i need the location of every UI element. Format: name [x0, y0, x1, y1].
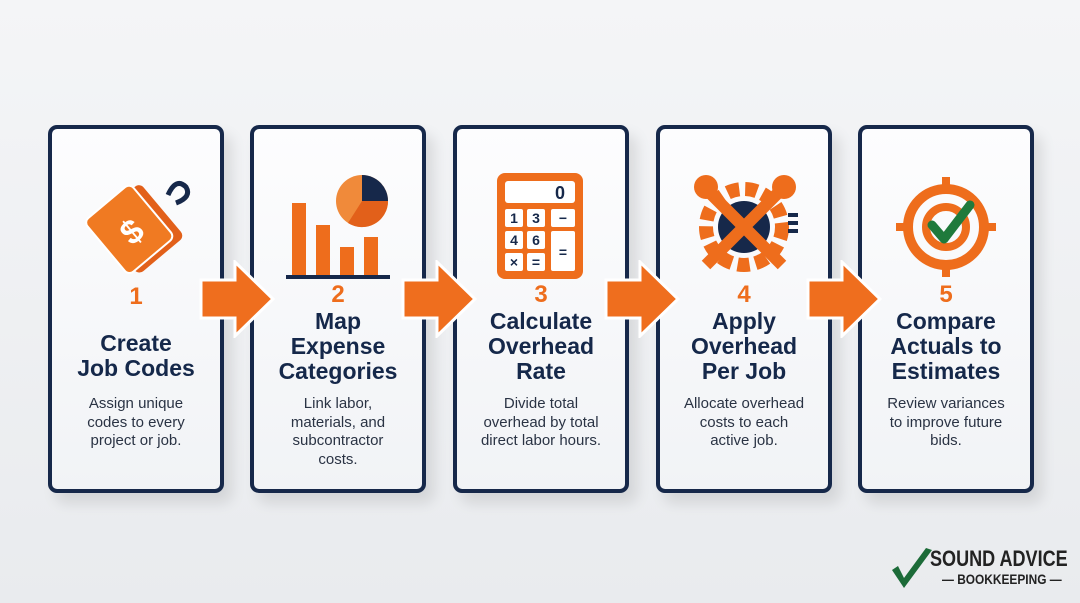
step number: 5: [939, 281, 953, 308]
card 3: calculate overhead rate: [453, 125, 629, 493]
description: [887, 395, 1005, 449]
icon: price tag: [87, 180, 190, 272]
heading: [488, 308, 594, 384]
heading: Actuals to: [890, 333, 1002, 359]
arrow 4: [806, 260, 878, 338]
icon: calculator: [497, 173, 583, 279]
description: [291, 395, 385, 468]
description: bids.: [930, 432, 962, 449]
description: Divide total: [504, 395, 578, 412]
heading: Apply: [712, 308, 776, 334]
logo: sound advice bookkeeping: — BOOKKEEPING —: [942, 571, 1062, 587]
icon: calculator: ×: [510, 254, 518, 270]
description: Link labor,: [304, 395, 372, 412]
heading: Overhead: [691, 333, 797, 359]
description: overhead by total: [483, 414, 599, 430]
step number: 4: [737, 281, 751, 308]
card 4: apply overhead per job: [656, 125, 832, 493]
step number: 2: [331, 281, 345, 308]
heading: [890, 308, 1002, 384]
description: active job.: [710, 432, 778, 449]
icon: bar chart and pie: [286, 175, 390, 279]
description: Review variances: [887, 395, 1005, 412]
icon: calculator: −: [559, 210, 567, 226]
description: Assign unique: [89, 395, 183, 412]
heading: Map: [315, 308, 361, 334]
heading: Overhead: [488, 333, 594, 359]
icon: target with check: [896, 177, 996, 277]
heading: Rate: [516, 358, 566, 384]
icon: calculator: =: [532, 254, 540, 270]
logo: sound advice bookkeeping: SOUND ADVICE: [930, 546, 1068, 571]
logo: sound advice bookkeeping: [892, 546, 1068, 588]
icon: price tag: $: [113, 211, 152, 253]
card 2: map expense categories: [250, 125, 426, 493]
description: costs.: [318, 450, 358, 468]
heading: [279, 308, 397, 384]
icon: gear and wrenches: [694, 175, 798, 272]
icon: calculator: 1: [510, 210, 518, 226]
description: costs to each: [700, 414, 788, 430]
description: materials, and: [291, 414, 385, 430]
description: [684, 395, 804, 449]
description: codes to every: [87, 414, 185, 430]
heading: Create: [100, 330, 172, 356]
heading: Job Codes: [77, 355, 195, 381]
heading: Calculate: [490, 308, 592, 334]
heading: Compare: [896, 308, 996, 334]
heading: Categories: [279, 358, 397, 384]
icon: calculator: 3: [532, 210, 540, 226]
heading: [77, 330, 195, 381]
arrow 2: [402, 260, 473, 338]
description: project or job.: [91, 432, 181, 449]
description: [87, 395, 185, 449]
heading: Per Job: [702, 358, 786, 384]
card 5: compare actuals to estimates: [858, 125, 1034, 493]
card 1: create job codes: [48, 125, 224, 493]
step number: 3: [534, 281, 548, 308]
arrow 3: [604, 260, 676, 338]
heading: Estimates: [892, 358, 1000, 384]
step number: 1: [129, 283, 143, 310]
icon: calculator: 4: [510, 232, 518, 248]
icon: calculator: =: [559, 244, 567, 260]
icon: calculator: 6: [532, 232, 540, 248]
heading: [691, 308, 797, 384]
description: [481, 395, 601, 449]
description: Allocate overhead: [684, 395, 804, 412]
icon: calculator: 0: [555, 183, 565, 203]
arrow 1: [200, 260, 271, 338]
description: to improve future: [890, 414, 1002, 430]
description: subcontractor: [293, 432, 383, 449]
description: direct labor hours.: [481, 432, 601, 449]
heading: Expense: [291, 333, 385, 359]
